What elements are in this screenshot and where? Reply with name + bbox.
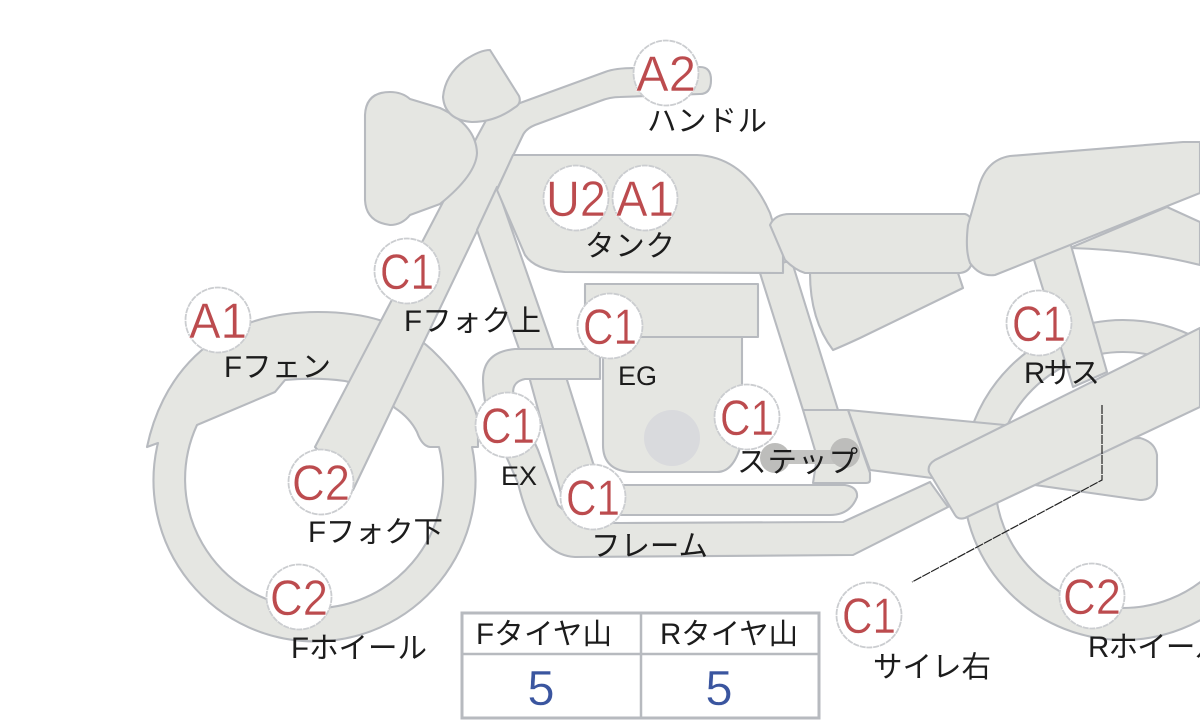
rear fender <box>1070 207 1200 265</box>
label: front fender: Fフェン <box>224 351 331 384</box>
exhaust pipe <box>483 349 948 557</box>
label: lower fork: Fフォク下 <box>308 516 443 549</box>
badge C1 upper fork: C1 <box>380 244 434 300</box>
label: right muffler: サイレ右 <box>873 651 991 684</box>
engine upper block <box>585 284 758 337</box>
footrest plate <box>803 410 870 483</box>
table header: front tire tread: Fタイヤ山 <box>476 618 612 651</box>
table header: rear tire tread: Rタイヤ山 <box>660 618 798 651</box>
rear wheel <box>963 320 1200 640</box>
seat side cover upper <box>770 214 972 273</box>
label: frame: フレーム <box>591 530 708 563</box>
badge C1 right muffler: C1 <box>842 588 896 644</box>
meter <box>443 50 520 122</box>
leader line to muffler <box>912 405 1102 582</box>
step bar <box>760 438 860 473</box>
label: tank: タンク <box>585 230 675 263</box>
badge C1 frame: C1 <box>566 470 620 526</box>
badge A1 tank: A1 <box>616 171 674 227</box>
badge C1 step: C1 <box>720 390 774 446</box>
label: exhaust: EX <box>501 461 537 491</box>
label: rear suspension: Rサス <box>1024 357 1100 390</box>
front fork and handlebar <box>315 67 711 490</box>
label: step: ステップ <box>737 446 858 479</box>
seat side cover lower <box>810 273 963 350</box>
badge C1 exhaust: C1 <box>481 398 535 454</box>
badge U2 tank: U2 <box>546 171 606 227</box>
value: rear tire tread: 5 <box>705 662 733 716</box>
badge C1 engine: C1 <box>583 299 637 355</box>
badge C1 rear suspension: C1 <box>1012 296 1066 352</box>
badge A2 handlebar: A2 <box>636 46 696 102</box>
badge C2 lower fork: C2 <box>292 455 350 511</box>
tire tread table <box>462 613 819 718</box>
engine gear cover <box>644 410 700 466</box>
headlight <box>365 92 477 225</box>
value: front tire tread: 5 <box>527 662 555 716</box>
label: engine: EG <box>618 361 657 391</box>
label: front wheel: Fホイール <box>291 632 427 665</box>
badge C2 rear wheel: C2 <box>1063 569 1121 625</box>
rear frame post <box>760 262 838 410</box>
front wheel and fender <box>147 312 478 641</box>
swingarm <box>848 410 1005 478</box>
frame downtube and lower rail <box>477 187 857 515</box>
tank <box>497 155 783 273</box>
muffler <box>929 328 1200 519</box>
seat <box>967 142 1200 275</box>
label: handlebar: ハンドル <box>647 105 767 138</box>
label: upper fork: Fフォク上 <box>404 305 541 338</box>
engine lower block <box>603 337 742 472</box>
rear shock <box>1031 235 1107 387</box>
badge A1 front fender: A1 <box>189 293 247 349</box>
chain case <box>1000 438 1157 500</box>
badge C2 front wheel: C2 <box>270 570 328 626</box>
